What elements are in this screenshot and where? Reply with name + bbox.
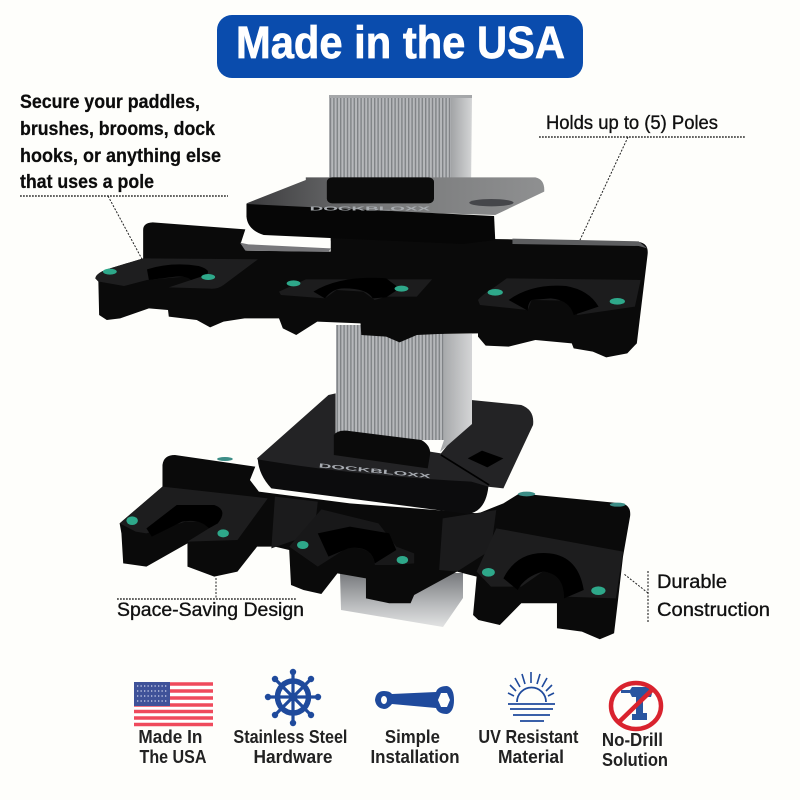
callout: secure your paddles: hooks, or anything else [20,146,221,167]
product: middle and lower post [336,325,463,627]
middle clip opening [318,527,396,563]
callout: secure your paddles: brushes, brooms, dock [20,119,215,140]
icon: wrench [375,686,454,714]
feature: simple installation: Simple [385,726,440,747]
middle clip pins [297,541,408,564]
product: upper metal post [329,95,472,205]
icon: sun [508,672,555,721]
feature: no-drill solution: Solution [602,749,668,770]
product: upper pole holder [95,177,648,357]
callout: secure your paddles [20,92,228,261]
rear pins [217,457,626,507]
callout: holds up to 5 poles: Holds up to (5) Poles [546,113,718,134]
feature: simple installation [370,686,460,767]
black post strap [334,431,430,468]
feature: UV resistant material: Material [498,746,564,767]
left clip pins [103,269,215,280]
feature: simple installation: Installation [370,746,460,767]
brand text: DOCKBLOXX [318,463,433,480]
textured body panels [271,497,496,572]
upper mounting plate top [246,177,544,215]
callout: space-saving design: Space-Saving Design [117,599,304,621]
callout: durable construction: Durable [657,571,727,593]
feature: UV resistant material [478,672,584,767]
left clip opening [147,264,208,280]
title banner: Made in the USA [236,17,565,68]
post right face above lower plate [440,334,472,452]
feature: no-drill solution: No-Drill [602,729,663,750]
icon: no drill [611,683,661,729]
right clip top [477,528,623,598]
feature: stainless steel hardware: Stainless Steel [233,726,347,747]
left clip top [95,258,258,289]
right clip top [478,278,641,315]
plate hole [468,451,503,467]
plate front [258,459,488,514]
middle clip pins [287,280,408,292]
black post strap [327,177,434,203]
slot underside [240,243,331,252]
feature: stainless steel hardware: Hardware [254,746,332,767]
right clip opening [509,286,599,315]
screw hole [469,199,514,206]
middle clip top [289,509,414,567]
feature: stainless steel hardware [233,669,353,767]
callout: durable construction: Construction [657,599,770,621]
right clip pins [488,289,625,305]
slot gap [248,233,331,248]
left clip top [120,487,268,542]
plate seam [441,455,489,485]
brand text: DOCKBLOXX [310,206,433,213]
callout: holds up to 5 poles [539,113,746,240]
feature: no-drill solution [602,683,668,770]
icon: american flag [134,682,213,726]
callout: secure your paddles: that uses a pole [20,172,154,193]
right clip pins [482,568,606,595]
icon: ship wheel [265,669,321,726]
middle clip top [279,279,432,300]
right clip opening [503,553,584,598]
callout: durable construction [624,571,770,623]
callout: secure your paddles: Secure your paddles, [20,92,200,113]
right bar highlight [512,239,647,248]
product: lower plate top [257,393,533,513]
unit silhouette [120,455,630,639]
unit silhouette [95,222,648,357]
product: lower pole holder [120,431,630,639]
left clip opening [146,505,222,537]
feature: made in the USA: The USA [140,746,206,767]
left clip pins [126,516,229,537]
feature: UV resistant material: UV Resistant [478,726,578,747]
plate front [246,204,495,244]
middle clip opening [313,278,400,298]
feature: made in the USA [134,682,213,767]
feature: made in the USA: Made In [138,726,202,747]
